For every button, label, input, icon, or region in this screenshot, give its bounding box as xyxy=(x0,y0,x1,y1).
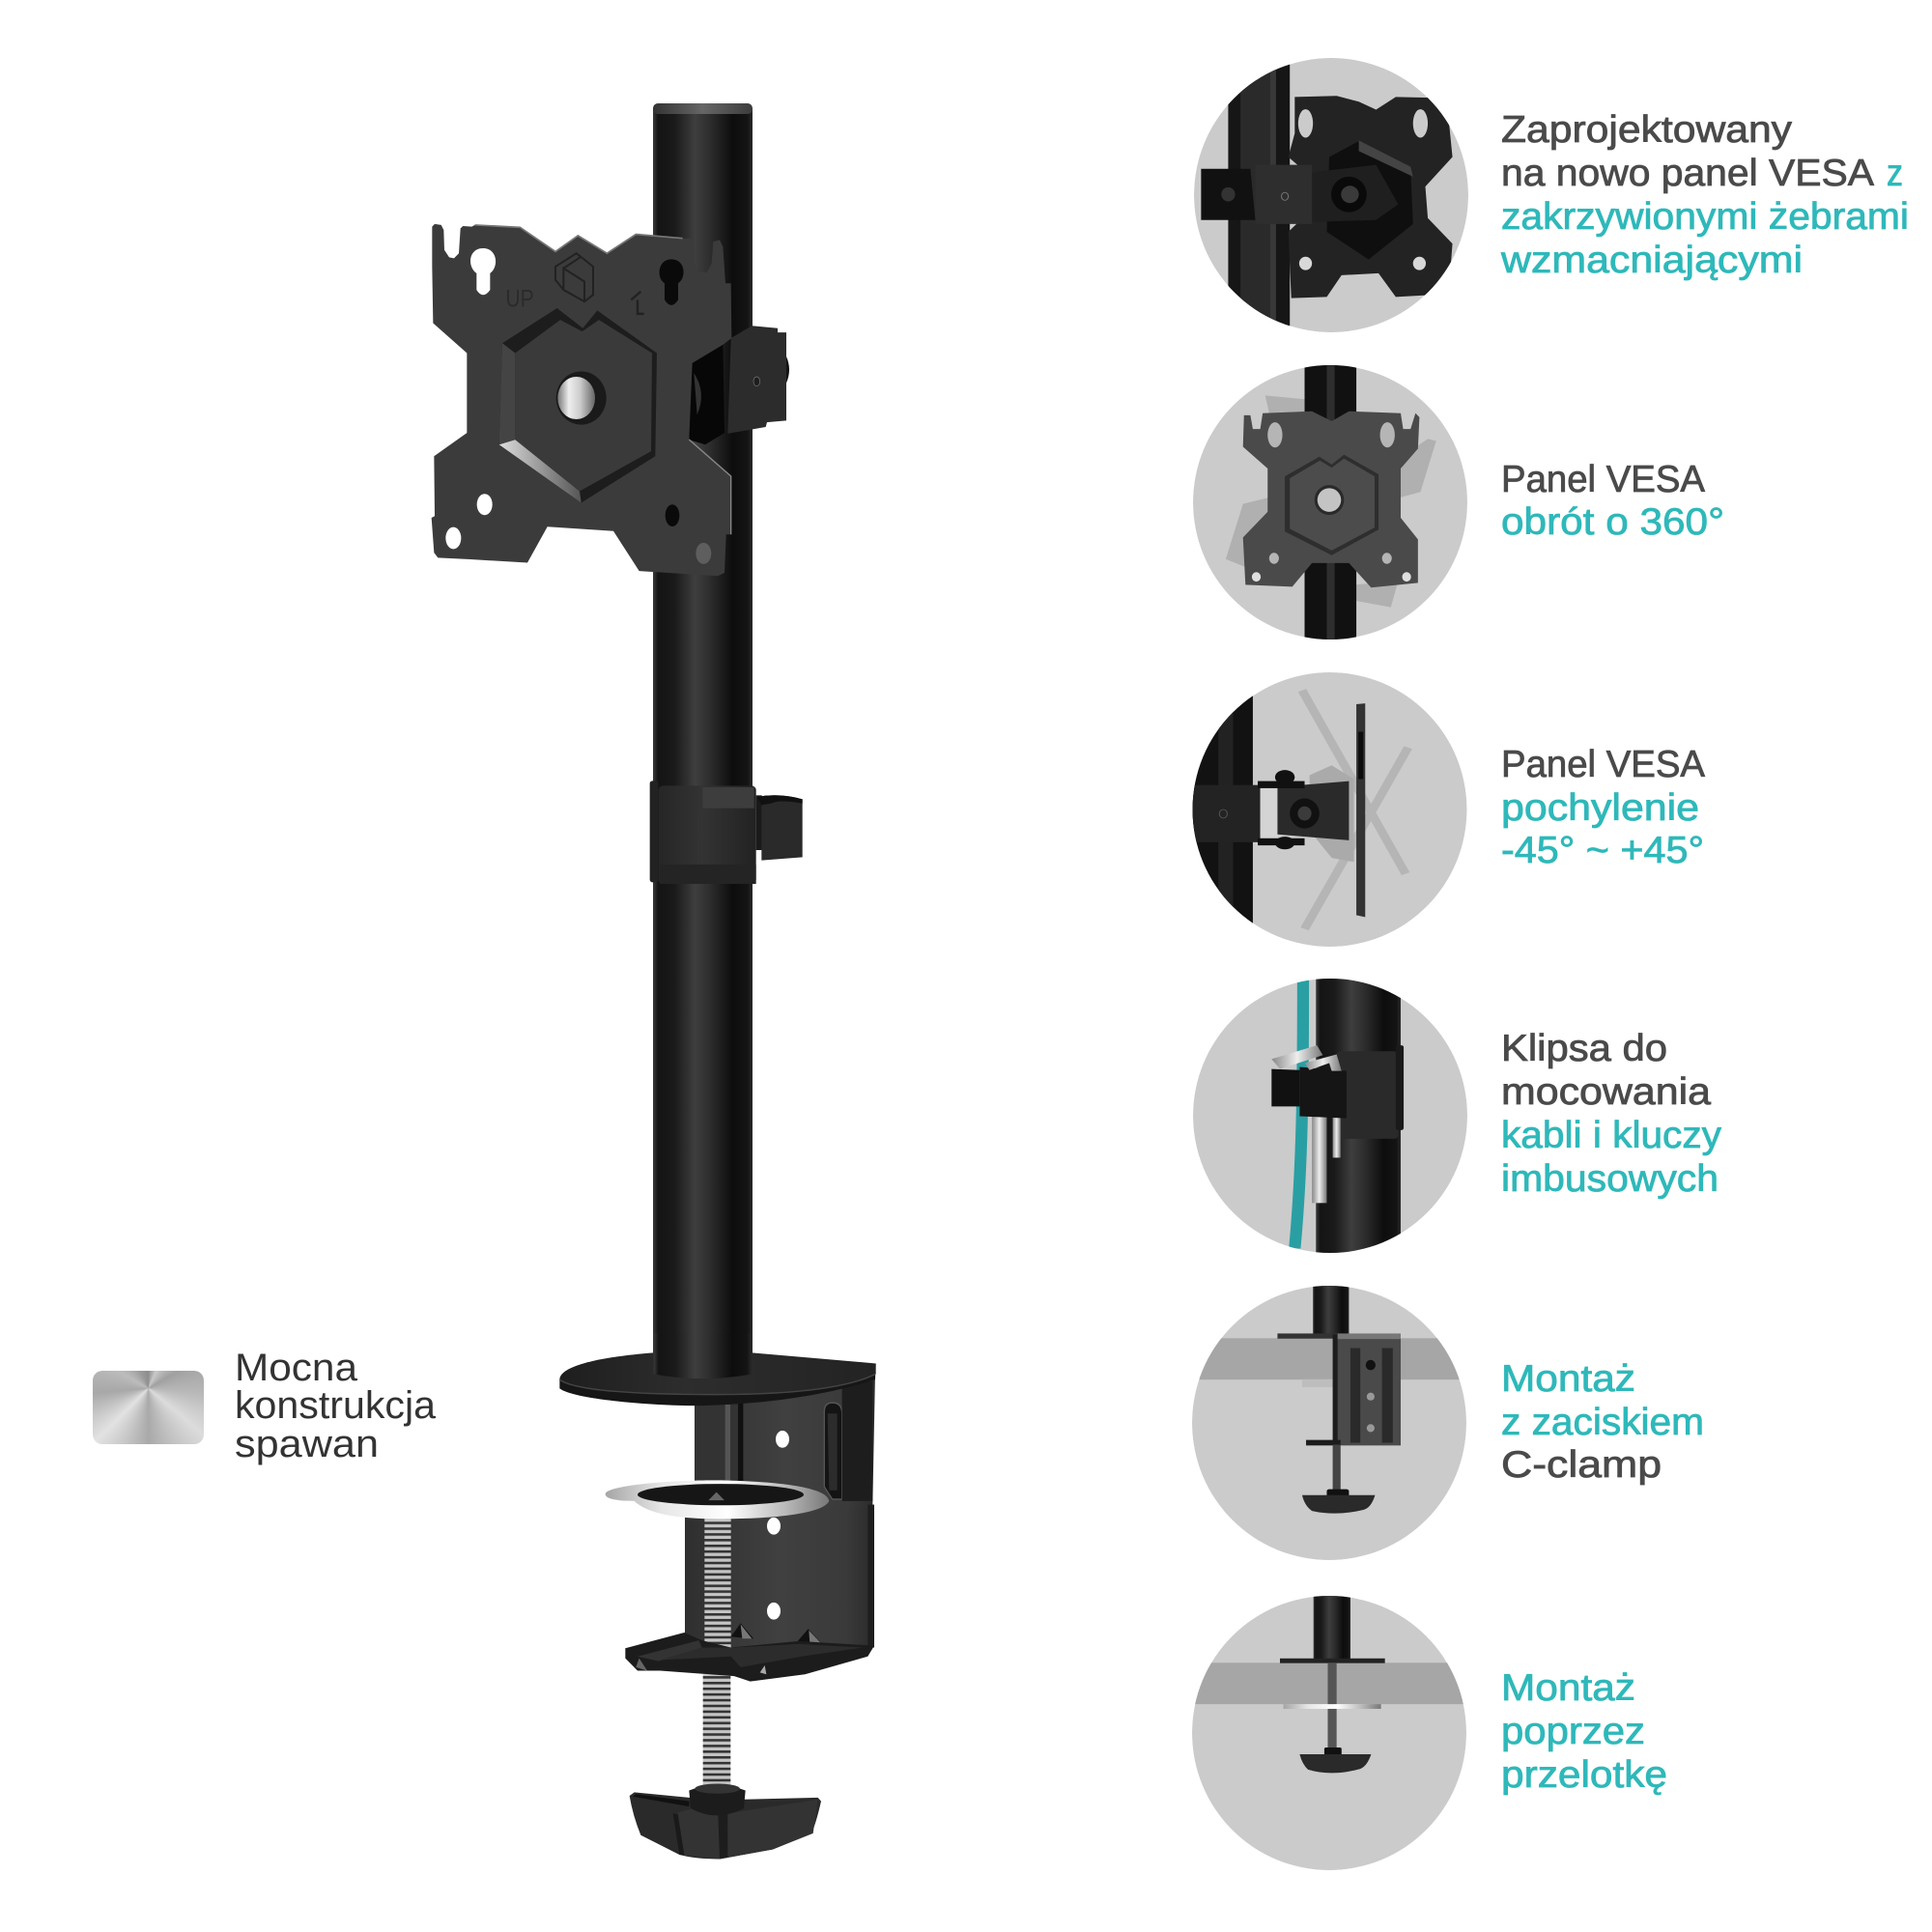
silver ring xyxy=(606,1480,829,1519)
feature 2 image: 360 rotation xyxy=(1193,362,1467,642)
screw thread xyxy=(703,1514,731,1785)
feature 2 text xyxy=(1501,459,1724,543)
feature 4 text xyxy=(1501,1028,1722,1200)
bracket behind VESA plate xyxy=(689,326,789,444)
feature 1 text: wzmacniającymi xyxy=(1500,240,1803,281)
embossed arrow xyxy=(631,292,644,314)
feature 3 text: pochylenie xyxy=(1501,787,1699,829)
cable clip band xyxy=(650,781,803,884)
clamp base xyxy=(559,1333,876,1859)
feature 1 text: na nowo panel VESA xyxy=(1501,153,1874,194)
icon: brushed metal swatch xyxy=(93,1371,204,1444)
feature 4 text: mocowania xyxy=(1501,1071,1711,1113)
base plate xyxy=(559,1333,876,1406)
feature 6 text: przelotkę xyxy=(1501,1754,1667,1796)
feature 1 text: z xyxy=(1887,153,1903,194)
feature 1 text xyxy=(1500,109,1909,281)
left callout: welded construction: Mocna xyxy=(235,1347,358,1389)
feature 3 text xyxy=(1501,744,1705,871)
feature 2 text: Panel VESA xyxy=(1501,459,1705,500)
feature 5 text: Montaż xyxy=(1501,1358,1635,1400)
feature 3 image: tilt xyxy=(1189,668,1466,952)
main product: monitor arm pole xyxy=(653,103,753,1383)
feature 6 image: grommet mount xyxy=(1179,1593,1475,1870)
feature 2 text: obrót o 360° xyxy=(1501,501,1724,543)
feature 4 image: cable and hex key clip xyxy=(1193,977,1467,1256)
centre bolt xyxy=(556,371,607,425)
feature 3 text: -45° ~ +45° xyxy=(1501,830,1704,871)
feature 4 text: kabli i kluczy xyxy=(1501,1115,1722,1156)
clamp upper body xyxy=(695,1373,875,1516)
feature 6 text: poprzez xyxy=(1501,1711,1645,1752)
feature 4 text: imbusowych xyxy=(1501,1158,1719,1200)
feature 3 text: Panel VESA xyxy=(1501,744,1705,785)
knob xyxy=(630,1783,821,1859)
embossed logo xyxy=(555,253,593,301)
feature 5 text: z zaciskiem xyxy=(1501,1402,1704,1443)
feature 1 text: Zaprojektowany xyxy=(1501,109,1793,151)
left callout: welded construction: konstrukcja xyxy=(235,1384,437,1427)
feature 1 text: zakrzywionymi żebrami xyxy=(1501,196,1909,238)
feature 6 text: Montaż xyxy=(1501,1667,1635,1709)
VESA plate xyxy=(432,224,731,576)
feature 4 text: Klipsa do xyxy=(1501,1028,1667,1069)
feature 5 image: C-clamp mount xyxy=(1179,1283,1475,1560)
feature 6 text xyxy=(1501,1667,1667,1796)
keyholes and holes xyxy=(445,248,711,564)
hexagon recess xyxy=(499,308,657,502)
feature 5 text: C-clamp xyxy=(1501,1444,1662,1486)
embossed UP: UP xyxy=(505,286,534,312)
clamp lower body xyxy=(685,1505,874,1648)
feature 1 image: redesigned VESA plate xyxy=(1194,54,1468,338)
clamp foot xyxy=(625,1633,874,1682)
feature 5 text xyxy=(1501,1358,1704,1486)
left callout: welded construction xyxy=(235,1347,437,1465)
left callout: welded construction: spawan xyxy=(235,1423,379,1465)
